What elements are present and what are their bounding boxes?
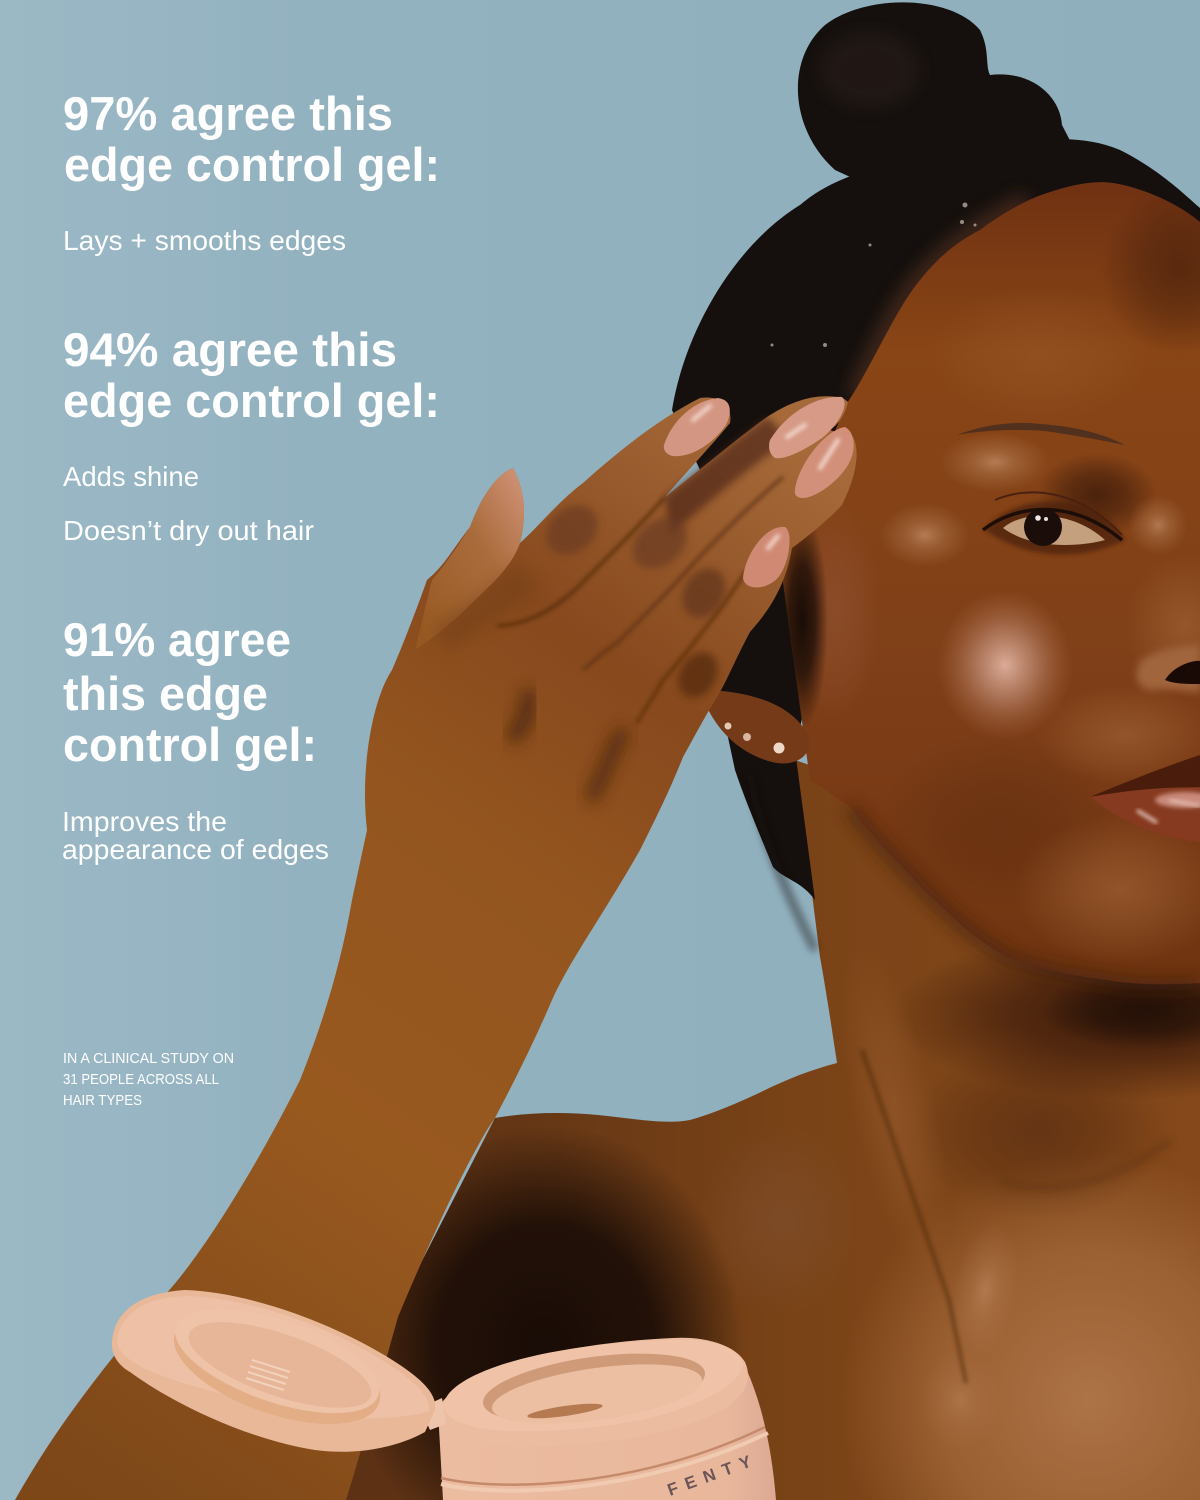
heading: this edge — [63, 667, 268, 720]
footnote: HAIR TYPES — [63, 1092, 142, 1109]
fingernails — [664, 397, 854, 587]
stat block: 94% — [63, 323, 440, 546]
arm and hand silhouette — [15, 396, 857, 1500]
footnote: IN A CLINICAL STUDY ON — [63, 1050, 234, 1067]
arm and hand — [15, 396, 857, 1500]
ear with earrings — [700, 690, 809, 763]
benefits: Doesn’t dry out hair — [63, 515, 314, 546]
model's portrait — [300, 2, 1200, 1500]
benefit: appearance of edges — [62, 834, 329, 865]
heading: edge control gel: — [63, 374, 440, 427]
heading: edge control gel: — [64, 138, 440, 191]
heading: 91% agree — [63, 613, 291, 666]
jar lid — [112, 1287, 435, 1452]
hair gel flakes — [770, 202, 976, 347]
stat block: 91% — [62, 613, 329, 865]
benefits — [63, 461, 314, 546]
benefit: Improves the — [62, 806, 227, 837]
shoulder and chest — [300, 760, 1200, 1500]
benefit: Lays + smooths edges — [63, 225, 346, 256]
benefit — [62, 806, 329, 865]
footnote — [63, 1050, 234, 1109]
jar label text: FENTY — [665, 1449, 761, 1500]
jaw shadow — [850, 807, 1200, 984]
hair cap — [672, 139, 1200, 950]
lips — [1090, 755, 1200, 842]
heading: 94% agree this — [63, 323, 397, 376]
footnote: 31 PEOPLE ACROSS ALL — [63, 1071, 219, 1088]
benefits: Adds shine — [63, 461, 199, 492]
heading — [63, 323, 440, 427]
eyebrow — [957, 423, 1125, 445]
hair bun — [798, 2, 1080, 200]
nose — [1137, 645, 1200, 693]
eye — [983, 492, 1125, 555]
jar body — [438, 1360, 776, 1500]
heading — [63, 87, 440, 191]
jar hinge — [420, 1398, 446, 1430]
heading: 97% agree this — [63, 87, 393, 140]
jar rim — [437, 1338, 748, 1446]
stat block: 97% — [63, 87, 440, 256]
heading — [63, 613, 317, 771]
finger shading and creases — [440, 417, 790, 800]
thumb — [415, 468, 524, 650]
heading: control gel: — [63, 718, 317, 771]
face — [776, 182, 1200, 984]
product: open jar — [112, 1287, 776, 1500]
